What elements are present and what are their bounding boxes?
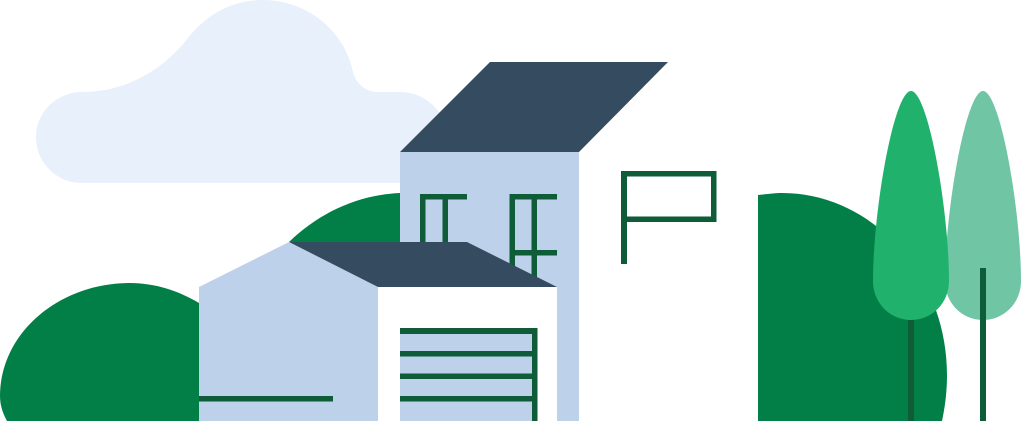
hill: left: [0, 283, 199, 421]
garage gable: [199, 242, 378, 287]
upper house: [400, 62, 668, 421]
medium tree trunk: [908, 320, 914, 421]
garage door lines: [400, 328, 538, 421]
tree: light: [945, 91, 1021, 421]
hill: right: [758, 193, 947, 421]
window: right: [510, 194, 557, 287]
garage: [199, 242, 557, 421]
upper house roof: [400, 62, 668, 152]
garage side wall: [199, 287, 378, 421]
window: left: [420, 194, 467, 287]
upper house wall: [400, 152, 579, 421]
garage roof: [289, 242, 557, 287]
side wall line: [199, 396, 333, 402]
medium tree crown: [873, 91, 949, 320]
cloud: [36, 0, 443, 183]
tree: medium: [873, 91, 949, 421]
garage front wall: [378, 287, 557, 421]
hill: middle: [289, 193, 400, 242]
light tree trunk: [980, 268, 986, 421]
flag outline window: [621, 171, 716, 264]
light tree crown: [945, 91, 1021, 320]
garage door panel: [400, 328, 537, 421]
